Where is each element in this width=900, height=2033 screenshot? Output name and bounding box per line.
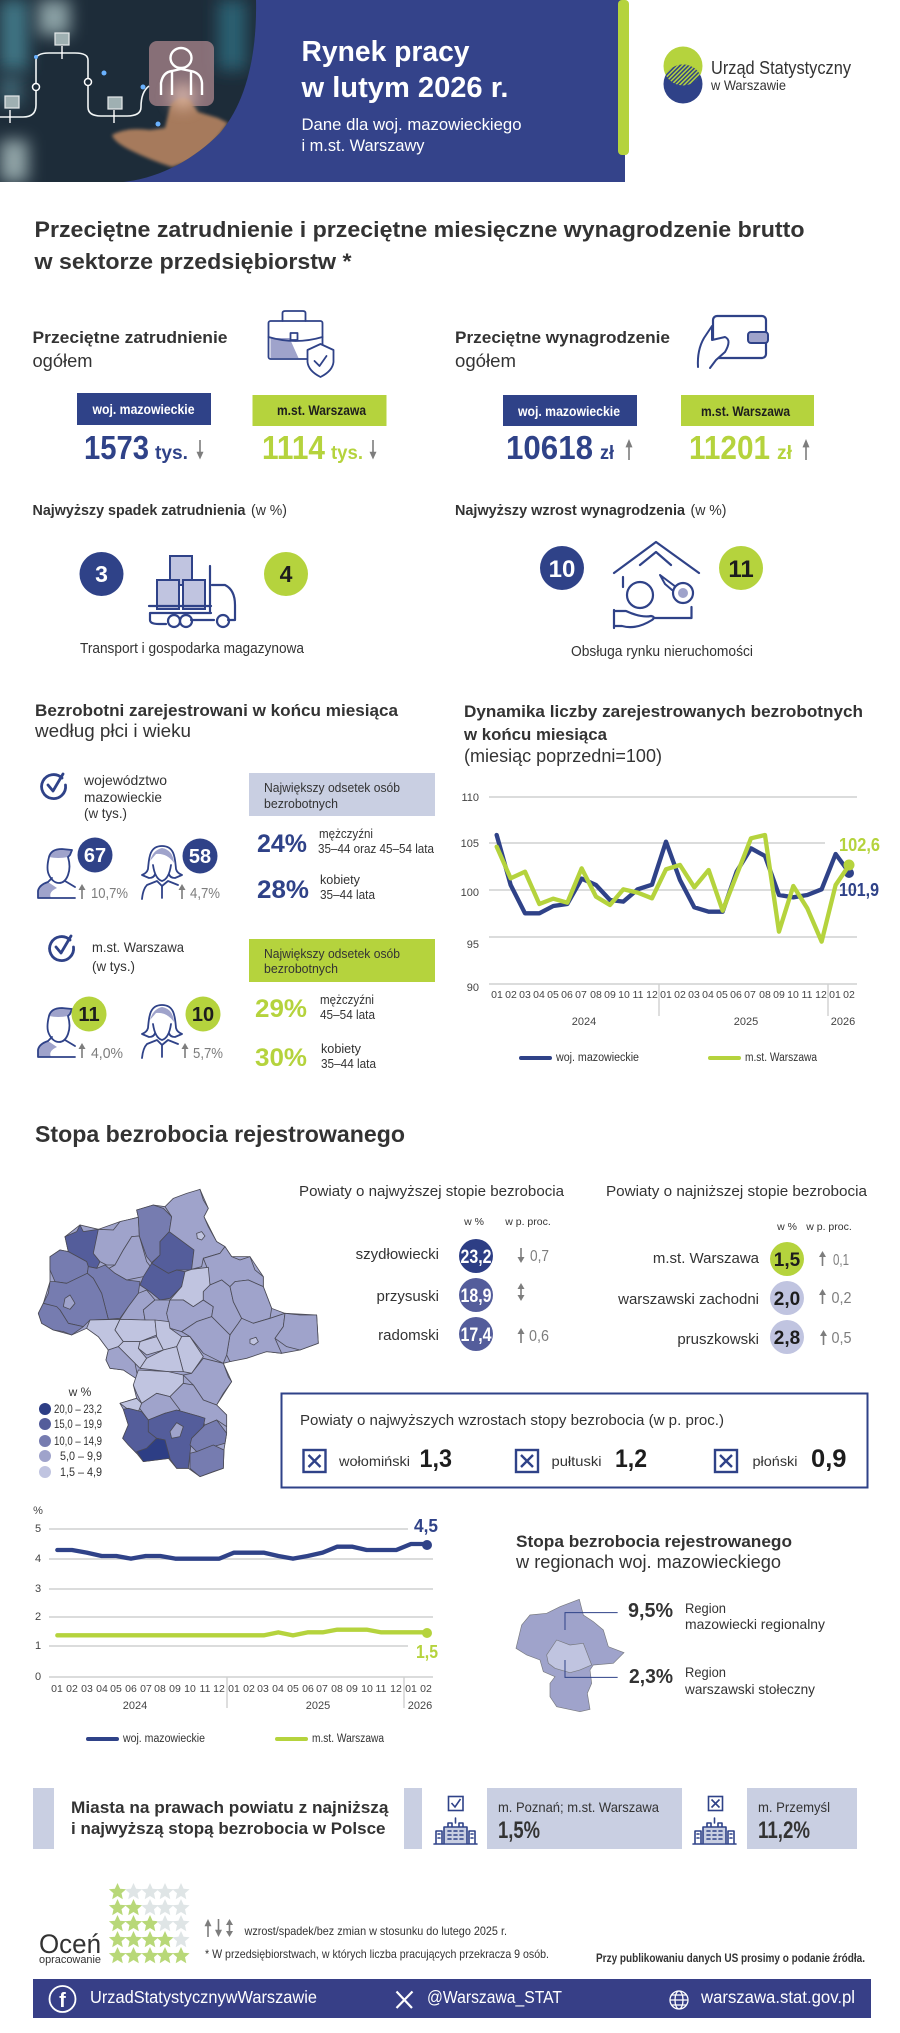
x axis labels: 12 [646,989,658,1001]
icon: wallet in hand [698,316,768,368]
value labels [414,1516,438,1662]
circle value 10 [540,546,584,590]
region: mazowiecki regionalny: Region [685,1600,726,1616]
highest rate city: 11,2% [758,1817,810,1844]
men share [257,826,435,858]
x axis labels: 06 [125,1683,137,1695]
item: pułtuski [516,1445,647,1473]
x axis labels: 05 [110,1683,122,1695]
value labels: 4,5 [414,1516,438,1536]
value: 1114 tys. [262,429,376,466]
note: arrows legend [204,1919,507,1938]
x axis labels: 09 [773,989,785,1001]
row: pruszkowski: 2,8 [774,1328,800,1349]
circle value 4 [264,552,308,596]
women share [255,1041,377,1072]
table heading: Powiaty o najniższej stopie bezrobocia [606,1183,868,1200]
men: 67: 10,7% [91,885,128,902]
x axis labels: 2026 [831,1016,855,1028]
x axis labels: 01 [51,1683,63,1695]
note: source request: Przy publikowaniu danych US prosimy o podanie źródła. [596,1953,865,1965]
value: 11201 zł: zł [777,443,793,464]
x axis labels: 2026 [408,1700,432,1712]
x axis labels: 08 [154,1683,166,1695]
circle value 10: 10 [549,556,575,583]
panel: voivodeship largest share [249,773,435,904]
heading: dynamics chart [463,702,863,766]
label box: m.st. Warszawa: m.st. Warszawa [701,403,790,419]
x axis labels: 11 [633,989,644,1001]
footer bar [33,1979,871,2018]
y axis labels: 95 [467,939,479,951]
label box: m.st. Warszawa: m.st. Warszawa [277,402,366,418]
x axis labels: 2024 [572,1016,596,1028]
column heads: w p. proc. [504,1216,551,1228]
item: płoński: płoński [752,1453,798,1469]
website: warszawa.stat.gov.pl [700,1987,855,2007]
men share: mężczyźni [320,992,374,1007]
men: 67 [38,838,128,902]
series: woj. mazowieckie [57,1540,432,1559]
header photo [0,0,260,182]
row: szydłowiecki [356,1239,549,1273]
y axis labels: 90 [467,982,479,994]
map legend: 15,0 – 19,9 [54,1417,102,1431]
label box: woj. mazowieckie [77,393,211,425]
row: warszawski zachodni: 0,2 [832,1290,852,1307]
caption: Transport i gospodarka magazynowa [80,640,305,657]
logo: w Warszawie [710,77,786,93]
men: 11: 11 [78,1004,100,1026]
row: m.st. Warszawa: m.st. Warszawa [653,1250,760,1267]
x axis labels: 10 [361,1683,373,1695]
value: 1573 tys. [84,429,204,466]
region label: województwo [83,772,167,788]
region label [83,772,167,821]
map legend: 10,0 – 14,9 [54,1434,102,1448]
row: szydłowiecki: 23,2 [460,1247,492,1268]
x axis labels: 02 [505,989,517,1001]
heading: dynamics chart: w końcu miesiąca [463,725,608,744]
men share: 45–54 lata [320,1007,376,1022]
women: 58: 4,7% [190,885,220,902]
x axis labels: 03 [81,1683,93,1695]
subheading: (w %) [251,502,287,519]
heading: dynamics chart: Dynamika liczby zarejestrowanych bezrobotnych [464,702,863,721]
heading: dynamics chart: (miesiąc poprzedni=100) [464,746,662,766]
x axis labels: 02 [674,989,686,1001]
value: 10618 zł: zł [600,443,615,464]
region map [516,1599,624,1712]
block: largest employment decrease [32,502,308,657]
x axis labels: 02 [66,1683,78,1695]
value: 11201 zł: 11201 [689,429,770,466]
section heading: employment and wages: w sektorze przedsiębiorstw * [33,249,352,274]
label box: m.st. Warszawa [252,395,386,426]
x axis labels: 04 [702,989,714,1001]
x axis labels: 07 [575,989,587,1001]
logo: Urząd Statystyczny [711,58,851,78]
callout header: bezrobotnych [264,796,338,811]
women share: 35–44 lata [320,887,376,902]
y axis labels: 2 [35,1611,41,1623]
women: 10: 5,7% [193,1045,223,1062]
rating widget [39,1883,190,1966]
x axis labels: 09 [169,1683,181,1695]
region label [92,939,184,974]
subtitle [302,115,522,155]
y axis labels: 100 [461,887,479,899]
facebook handle: UrzadStatystycznywWarszawie [90,1987,317,2007]
row: przysuski: przysuski [376,1288,439,1305]
women share: 30% [255,1044,307,1072]
x axis labels: 04 [272,1683,284,1695]
row: m.st. Warszawa: 0,1 [833,1252,849,1269]
y axis labels: 105 [461,838,479,850]
icon: check [50,936,74,961]
icon: globe [670,1991,688,2009]
highest rate city [693,1788,857,1849]
x axis labels: 2025 [306,1700,330,1712]
callout header [249,939,435,982]
block: largest wage increase [455,502,763,660]
row: m.st. Warszawa [653,1242,849,1276]
women share [257,872,376,904]
women share: kobiety [320,872,360,887]
icon: X [396,1992,412,2008]
women share: kobiety [321,1041,361,1056]
women share: 35–44 lata [321,1056,377,1071]
row: warszawski zachodni: 2,0 [774,1289,800,1310]
x axis labels: 07 [316,1683,328,1695]
heading: w regionach woj. mazowieckiego [515,1552,781,1572]
y axis labels: 1 [35,1640,41,1652]
women: 58 [142,838,220,902]
men share: mężczyźni [319,826,373,841]
label box: m.st. Warszawa [681,395,814,426]
x axis labels: 10 [184,1683,196,1695]
women share: 28% [257,876,309,904]
map legend [39,1385,102,1479]
table: lowest unemployment counties [606,1183,868,1354]
series: m.st. Warszawa [497,835,854,942]
icon: truck [149,556,235,627]
x axis labels: 11 [200,1683,211,1695]
x axis labels: 02 [243,1683,255,1695]
heading: wages: ogółem [455,351,516,371]
x axis labels: 11 [802,989,813,1001]
x axis labels: 10 [787,989,799,1001]
women: 10: 10 [192,1004,214,1026]
panel: employment [32,311,386,466]
lowest rate city: m. Poznań; m.st. Warszawa [498,1799,659,1815]
item: pułtuski: pułtuski [552,1453,602,1469]
callout header: Największy odsetek osób [264,780,400,795]
heading: i najwyższą stopą bezrobocia w Polsce [71,1819,386,1838]
subheading: Najwyższy wzrost wynagrodzenia [455,502,686,519]
column heads: w % [463,1216,484,1228]
region label: (w tys.) [84,805,127,821]
row: warszawski zachodni: warszawski zachodni [617,1291,759,1308]
heading: registered unemployed: według płci i wieku [34,721,191,741]
map legend: w % [68,1385,92,1399]
y axis labels [461,792,479,994]
legend: m.st. Warszawa [312,1733,385,1745]
value labels [839,835,880,900]
series: woj. mazowieckie [497,835,854,913]
region: mazowiecki regionalny [628,1600,825,1632]
accent bar [618,0,629,155]
note: enterprises footnote: * W przedsiębiorstwach, w których liczba pracujących przekracza 9 osób. [205,1947,549,1961]
column heads: w p. proc. [805,1221,852,1233]
x axis labels: 01 [405,1683,417,1695]
column heads: w % [776,1221,797,1233]
row: przysuski [376,1278,524,1312]
rating stars [109,1883,190,1963]
icon: check [42,774,66,799]
men share: 24% [257,830,307,858]
heading: Stopa bezrobocia rejestrowanego [516,1532,792,1551]
line chart: unemployment rate [33,1505,438,1745]
subtitle: Dane dla woj. mazowieckiego [302,115,522,134]
panel: cities [33,1788,857,1849]
y axis labels: % [33,1505,43,1517]
lowest rate city [434,1788,682,1849]
value: 1573 tys.: tys. [155,443,188,464]
item: wołomiński: wołomiński [338,1453,410,1469]
icon: house, key and hand [614,542,699,628]
choropleth map of counties [38,1189,318,1477]
region: warszawski stołeczny: 2,3% [629,1666,673,1688]
row: przysuski: 18,9 [460,1286,492,1307]
row: m.st. Warszawa: 1,5 [774,1250,801,1271]
subtitle: i m.st. Warszawy [302,136,425,155]
main title [300,36,508,104]
circle value 3: 3 [95,561,108,587]
panel: Warsaw unemployed [38,936,223,1062]
y axis labels: 0 [35,1671,41,1683]
x axis labels: 05 [547,989,559,1001]
main title: Rynek pracy [302,36,470,68]
lowest rate city: 1,5% [498,1817,540,1844]
heading: Miasta na prawach powiatu z najniższą [71,1798,389,1817]
region: warszawski stołeczny: Region [685,1664,726,1680]
rating label: Oceń [39,1929,101,1959]
x axis labels: 09 [604,989,616,1001]
icon: facebook [50,1986,76,2012]
series: m.st. Warszawa [57,1628,432,1638]
legend: woj. mazowieckie [555,1052,639,1064]
X handle: @Warszawa_STAT [427,1987,562,2008]
heading: employment: ogółem [32,351,92,371]
x axis labels: 2024 [123,1700,147,1712]
row: radomski [378,1317,549,1351]
heading: registered unemployed: Bezrobotni zarejestrowani w końcu miesiąca [35,701,399,720]
women: 10 [142,996,223,1062]
men: 67: 67 [84,845,106,867]
circle value 11 [719,546,763,590]
header banner [0,0,629,182]
y axis labels: 110 [461,792,479,804]
x axis labels [491,989,855,1028]
y axis labels [33,1505,43,1683]
x axis labels: 06 [561,989,573,1001]
y axis labels: 5 [35,1523,41,1535]
region label: m.st. Warszawa [92,939,184,955]
note: arrows legend: wzrost/spadek/bez zmian w stosunku do lutego 2025 r. [244,1924,507,1938]
rating label: opracowanie [39,1954,101,1966]
x axis labels: 11 [376,1683,387,1695]
x axis labels: 03 [257,1683,269,1695]
table heading: Powiaty o najwyższej stopie bezrobocia [299,1183,565,1200]
region label: mazowieckie [84,789,162,805]
heading: registered unemployment rate: Stopa bezrobocia rejestrowanego [35,1121,405,1147]
heading: wages: Przeciętne wynagrodzenie [455,328,670,347]
item: pułtuski: 1,2 [615,1445,647,1473]
heading [515,1532,792,1572]
row: szydłowiecki: 0,7 [530,1248,549,1265]
x axis labels: 06 [302,1683,314,1695]
column heads [776,1221,852,1233]
x axis labels: 01 [228,1683,240,1695]
x axis labels: 05 [716,989,728,1001]
x axis labels: 03 [519,989,531,1001]
item: wołomiński [304,1445,452,1473]
x axis labels: 03 [688,989,700,1001]
row: szydłowiecki: szydłowiecki [356,1246,439,1263]
region: warszawski stołeczny [629,1664,815,1697]
panel: voivodeship unemployed [38,772,220,902]
circle value 4: 4 [280,561,293,587]
item: wołomiński: 1,3 [420,1445,452,1473]
map legend: 20,0 – 23,2 [54,1402,102,1416]
x axis labels: 12 [390,1683,402,1695]
legend [521,1052,818,1064]
map legend: 5,0 – 9,9 [60,1449,102,1463]
subheading: (w %) [690,502,727,519]
label box: woj. mazowieckie [503,395,637,426]
heading [71,1798,389,1838]
map legend: 1,5 – 4,9 [60,1465,102,1479]
column heads [463,1216,551,1228]
men: 11 [38,996,123,1062]
region: mazowiecki regionalny: mazowiecki regionalny [685,1616,825,1632]
heading: wages [455,328,670,371]
x axis labels: 01 [660,989,672,1001]
x axis labels: 04 [96,1683,108,1695]
region: warszawski stołeczny: warszawski stołeczny [684,1681,815,1697]
heading: employment: Przeciętne zatrudnienie [32,328,228,347]
table: highest unemployment counties [299,1183,565,1351]
caption: Obsługa rynku nieruchomości [571,643,753,660]
value labels: 1,5 [416,1642,438,1662]
value: 10618 zł: 10618 [506,429,593,466]
item: płoński: 0,9 [811,1445,846,1473]
region label: (w tys.) [92,958,135,974]
label box: woj. mazowieckie: woj. mazowieckie [517,403,620,419]
x axis labels: 02 [843,989,855,1001]
x axis labels: 08 [590,989,602,1001]
logo [664,46,851,104]
label box: woj. mazowieckie: woj. mazowieckie [92,401,195,417]
region: mazowiecki regionalny: 9,5% [628,1600,673,1622]
icon: briefcase with shield [268,311,334,377]
circle value 11: 11 [728,556,754,583]
panel: largest increases [282,1394,868,1488]
legend: woj. mazowieckie [122,1733,205,1745]
highest rate city: m. Przemyśl [758,1799,830,1815]
x axis labels: 2025 [734,1016,758,1028]
x axis labels: 01 [491,989,503,1001]
x axis labels: 08 [331,1683,343,1695]
row: pruszkowski: pruszkowski [677,1331,759,1348]
panel: wages [455,316,814,466]
heading: employment [32,328,228,371]
row: radomski: 17,4 [460,1325,492,1346]
value labels: 101,9 [839,880,879,900]
value: 1114 tys.: tys. [331,443,363,464]
panel: Warsaw largest share [249,939,435,1072]
row: warszawski zachodni [617,1281,852,1315]
x axis labels: 04 [533,989,545,1001]
x axis labels: 07 [744,989,756,1001]
circle value 3 [80,552,124,596]
callout header [249,773,435,816]
value: 1114 tys.: 1114 [262,429,326,466]
item: płoński [715,1445,846,1473]
men share: 29% [255,995,307,1023]
icon: facebook: f [59,1990,66,2012]
section heading: employment and wages: Przeciętne zatrudnienie i przeciętne miesięczne wynagrodzenie brutto [34,217,804,242]
legend: m.st. Warszawa [745,1052,818,1064]
section heading: employment and wages [33,217,804,274]
x axis labels [51,1683,432,1712]
men share [255,992,376,1023]
men: 11: 4,0% [91,1045,123,1062]
x axis labels: 10 [618,989,630,1001]
main title: w lutym 2026 r. [300,72,508,104]
x axis labels: 07 [140,1683,152,1695]
x axis labels: 02 [420,1683,432,1695]
legend [88,1733,385,1745]
heading: registered unemployed [34,701,399,741]
row: radomski: 0,6 [529,1328,549,1345]
x axis labels: 05 [287,1683,299,1695]
y axis labels: 3 [35,1583,41,1595]
row: radomski: radomski [378,1327,439,1344]
x axis labels: 12 [213,1683,225,1695]
x axis labels: 09 [346,1683,358,1695]
line chart: unemployment dynamics [461,792,880,1064]
callout header: Największy odsetek osób [264,946,400,961]
panel: regions [515,1532,825,1712]
value: 1573 tys.: 1573 [84,429,149,466]
women: 58: 58 [189,846,211,868]
x axis labels: 01 [829,989,841,1001]
subheading: Najwyższy spadek zatrudnienia [32,502,246,519]
value labels: 102,6 [839,835,880,855]
x axis labels: 12 [815,989,827,1001]
row: pruszkowski: 0,5 [832,1330,852,1347]
y axis labels: 4 [35,1553,41,1565]
men share: 35–44 oraz 45–54 lata [318,841,435,856]
panel title: Powiaty o najwyższych wzrostach stopy bezrobocia (w p. proc.) [300,1412,724,1429]
callout header: bezrobotnych [264,961,338,976]
x axis labels: 08 [759,989,771,1001]
row: pruszkowski [677,1320,852,1354]
x axis labels: 06 [730,989,742,1001]
